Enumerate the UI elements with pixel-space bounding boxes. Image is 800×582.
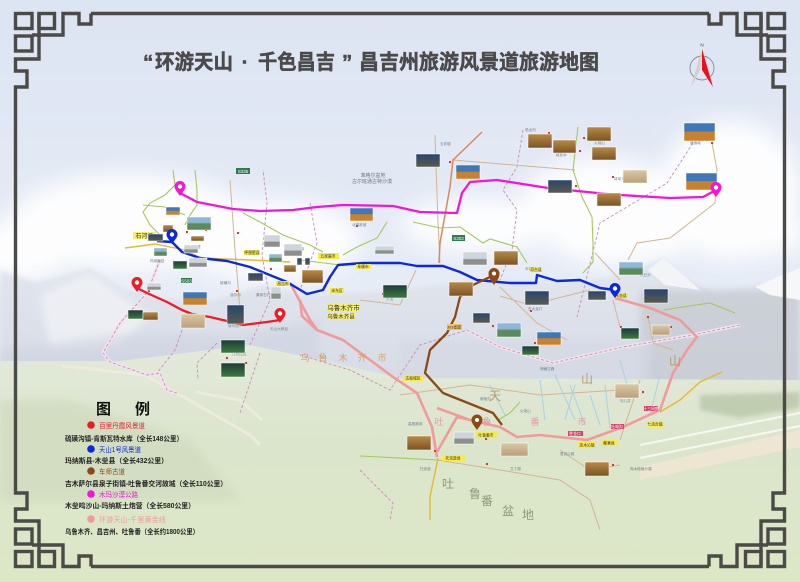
red tags: service stops: 十三间房 (643, 406, 659, 411)
map: small location labels: 魔鬼城 (690, 140, 701, 145)
background: mountains (0, 258, 800, 395)
pin: brown north (488, 268, 500, 285)
yellow tags: counties: 连木沁镇 (579, 442, 595, 448)
yellow tags: counties: 达坂城区 (405, 376, 421, 380)
title: ” (342, 51, 352, 74)
photo: west 1 (166, 207, 180, 215)
legend item: Cheshi ancient road (65, 467, 227, 488)
map: Urumqi region pink lettering: 乌 (300, 352, 310, 363)
map: large place name characters: 番 (481, 494, 493, 508)
route: blue Tianshan No.1 (157, 241, 615, 294)
green tags: road numbers: S303 (453, 236, 464, 241)
legend item: Cheshi ancient road: 吉木萨尔县泉子街镇-吐鲁番交河故城（全长110公里） (65, 479, 227, 488)
photo: west 9 (189, 258, 207, 267)
photo: south 5 (621, 328, 639, 339)
photo: Qitai 2 (588, 291, 606, 300)
map: Turpan region pink lettering (434, 416, 587, 427)
map: scenic spot marker dots (148, 132, 713, 466)
photo: north 4 (553, 140, 576, 153)
legend item: Danxia route: 百里丹霞风景道 (99, 421, 145, 430)
photo: Changji 2 (284, 244, 302, 256)
yellow tags: counties: 吐鲁番市 (478, 432, 494, 438)
yellow tags: counties: 木垒县 (615, 293, 627, 298)
map: small location labels: 北庭故城 (352, 222, 367, 227)
pin: blue west (166, 229, 178, 244)
yellow tags: counties: 米东区 (331, 288, 343, 293)
yellow tags: counties: 托克逊县 (445, 456, 461, 460)
map: large place name characters: 天 (489, 389, 501, 403)
photo: Mulei 2 (619, 262, 643, 275)
map: large place name characters: 地 (522, 508, 534, 522)
map: small location labels: 车师古道 (525, 266, 540, 271)
photo: Changji 4 (284, 265, 296, 272)
photo: Changji 5 (297, 258, 302, 265)
pin: blue east (610, 283, 620, 298)
map: small location labels: 火焰山 (520, 408, 531, 413)
map: small location labels: 托克逊 (420, 466, 431, 471)
photo: red route 6 (227, 305, 244, 324)
legend item: ring golden line: 环游天山-千里黄金线 (99, 515, 166, 524)
pin: red west (132, 277, 142, 292)
map: small location labels: 火烧山 (594, 140, 605, 145)
photo: Turpan sand (501, 443, 528, 456)
pin: brown south (472, 415, 482, 430)
map: large place name characters: 山 (581, 372, 593, 386)
yellow tags: counties: 阜康市 (357, 264, 369, 269)
map: orange expressway north (439, 132, 482, 263)
map: small location labels: 玛纳斯县 (150, 258, 165, 263)
map: Urumqi region pink lettering (300, 352, 387, 363)
route: magenta desert highway (180, 180, 716, 213)
map: small location labels: 硅化木 (556, 152, 567, 157)
photo: north 2 (456, 165, 480, 179)
green tags: road numbers (181, 168, 465, 283)
photo: Mulei 1 (644, 289, 668, 303)
photo: west 8 (173, 261, 187, 269)
legend (65, 401, 227, 536)
map: Urumqi region pink lettering: 齐 (357, 352, 367, 363)
yellow tags: counties: 鄯善县 (603, 440, 615, 446)
photo: Changji 7 (271, 287, 281, 299)
map: Urumqi region pink lettering: 鲁 (318, 352, 328, 363)
map: small location labels: 康家石门子 (256, 292, 274, 297)
route: brown ancient road (425, 275, 502, 425)
yellow tags: counties: 七克台镇 (647, 422, 663, 426)
photo: Kumtag desert (585, 462, 609, 476)
photo: Qitai 1 (525, 291, 549, 305)
map: Turpan region pink lettering: 吐 (434, 417, 444, 427)
map: Junggar basin label (352, 172, 392, 185)
yellow tag: Urumqi county: 乌鲁木齐县 (327, 312, 355, 320)
photo: west 5 (191, 236, 204, 241)
map: small location labels (150, 127, 701, 471)
photo: desert wall (597, 193, 621, 206)
background: clouds (0, 120, 800, 280)
yellow tag: Shihezi (133, 232, 156, 240)
map: Urumqi region pink lettering: 市 (377, 352, 387, 363)
legend item: desert highway: 木垒鸣沙山-玛纳斯土炮营（全长580公里） (65, 501, 195, 510)
photo: Shanshan (615, 384, 639, 398)
photo: west 3 (163, 225, 173, 232)
photo: forest (449, 282, 473, 296)
photo: Jimsar 2 (494, 251, 518, 265)
legend item: Tianshan No.1 route: 天山1号风景道 (99, 445, 141, 454)
photo: Mori 1 (684, 123, 715, 141)
yellow tag: Urumqi city: 乌鲁木齐市 (327, 303, 360, 312)
map: small location labels: 将军戈壁 (614, 176, 629, 181)
map: small location labels: 东大龙口 (528, 306, 543, 311)
photo: north 6 (592, 147, 616, 160)
title: 环游天山 (155, 50, 233, 74)
title: 昌吉州旅游风景道旅游地图 (359, 50, 599, 74)
photo: Turpan sunset (407, 436, 431, 450)
map: yellow highways (125, 244, 722, 520)
legend heading (96, 401, 150, 418)
map: small location labels: 高昌故城 (408, 421, 423, 426)
photo: red route 2 (183, 292, 207, 305)
map: large place name characters (442, 354, 681, 522)
map: Junggar basin label: 古尔班通古特沙漠 (352, 178, 392, 185)
green tags: road numbers: S335 (238, 169, 249, 174)
photo: south 4 (522, 346, 539, 355)
photo: Turpan ruin (454, 432, 474, 444)
title (143, 50, 599, 74)
photo: golden dome (302, 270, 323, 283)
map: small location labels: 天池 (386, 296, 394, 301)
yellow tags: counties: 昌吉市 (277, 281, 289, 286)
title: 千色昌吉 (258, 51, 335, 74)
background: grassland (0, 345, 800, 582)
photo: lake 1 (221, 340, 245, 353)
legend item: Tianshan No.1 route: 玛纳斯县-木垒县（全长432公里） (65, 456, 168, 465)
legend item: ring golden line: 乌鲁木齐、昌吉州、吐鲁番（全长约1800公里） (65, 527, 199, 536)
photo: pavilion (548, 180, 572, 193)
map: small location labels: 呼图壁 (190, 244, 201, 249)
pin: magenta west (174, 181, 186, 196)
map: Junggar basin label: 准格尔盆地 (360, 172, 386, 179)
photo: south 3 (537, 332, 561, 345)
yellow tags: counties: 呼图壁县 (244, 250, 260, 255)
pin: magenta east (710, 182, 722, 197)
map: small location labels: 庙尔沟 (230, 292, 241, 297)
legend item: desert highway (65, 490, 195, 510)
map: small location labels: 硫磺沟 (220, 280, 231, 285)
map: small location labels: 努尔加 (228, 323, 239, 328)
legend item: Danxia route (65, 421, 183, 443)
map: small location labels: 坎儿井 (620, 398, 631, 403)
photo: red route 3 (128, 310, 143, 319)
map: small location labels: 恐龙沟 (525, 127, 536, 132)
photo: Changji 1 (264, 235, 280, 247)
photo: north 5 (587, 127, 611, 141)
yellow tags: counties: 奇台县 (530, 267, 542, 272)
map: small location labels: 库木塔格沙漠 (630, 466, 652, 471)
photo: Shihezi (148, 234, 163, 241)
photo: west 7 (154, 248, 167, 256)
photo: north 3 (528, 134, 552, 148)
map: large place name characters: 盆 (502, 504, 514, 518)
map: administrative boundaries (103, 260, 740, 393)
photo: Mori 2 (686, 173, 717, 190)
photo: north desert (350, 208, 373, 221)
pin: red east (274, 308, 286, 323)
photo: south 6 (652, 325, 670, 335)
icon: north compass: N (700, 42, 704, 48)
photo: red route 4 (143, 312, 158, 320)
legend item: Cheshi ancient road: 车师古道 (99, 467, 125, 476)
map: Turpan region pink lettering: 市 (577, 416, 587, 427)
map: Turpan region pink lettering: 番 (530, 416, 540, 427)
map: small location labels: 江布拉克景区 (540, 341, 562, 346)
photo: Changji 3 (269, 254, 282, 262)
legend item: desert highway: 木玛沙漠公路 (99, 490, 138, 499)
map: large place name characters: 吐 (442, 477, 454, 491)
map: light blue rivers (490, 360, 660, 428)
photo: lake 2 (221, 363, 245, 377)
legend item: Danxia route: 硫磺沟镇-肯斯瓦特水库（全长148公里） (65, 434, 183, 443)
map: large place name characters: 山 (669, 354, 681, 368)
map: Urumqi region pink lettering: 木 (338, 352, 348, 363)
photo: west 2 (187, 217, 211, 230)
map: large place name characters: 鲁 (469, 487, 481, 501)
photo: west 6 (184, 245, 198, 253)
title: “ (143, 51, 153, 74)
map: small location labels: 葡萄沟 (480, 396, 491, 401)
photo: Jimsar 1 (463, 252, 487, 265)
legend heading: 例 (135, 401, 150, 418)
photo: north 1 (416, 154, 440, 167)
map: small location labels: 五彩城 (440, 141, 451, 146)
yellow tags: counties (244, 250, 664, 461)
route: ring road golden line (290, 283, 697, 457)
photo: south 1 (473, 313, 490, 323)
red tags: service stops: 胜金口 (569, 431, 581, 436)
photo: Changji 6 (305, 258, 310, 265)
red tags: service stops: 吐峪沟 (611, 424, 623, 429)
title: · (242, 51, 248, 74)
map: small location labels: 艾丁湖 (510, 466, 521, 471)
route: red Danxia (137, 288, 280, 325)
yellow tags: counties: 五家渠市 (320, 254, 336, 258)
photo: red route 5 (181, 314, 205, 328)
map: Turpan region pink lettering: 鲁 (482, 416, 492, 427)
map: small location labels: 昌吉回族 (290, 246, 305, 251)
map: small location labels: 博格达峰 (540, 366, 555, 371)
photo: north 7 (623, 170, 647, 183)
map: green highways (143, 127, 735, 460)
map: small location labels: 天山大峡谷 (270, 326, 288, 331)
legend item: Tianshan No.1 route (65, 445, 168, 465)
yellow tag: Shihezi: 石河子 (135, 232, 154, 240)
legend item: ring golden line (65, 515, 199, 536)
map: dashed boundaries (103, 130, 740, 520)
map: small location labels: 江布拉克 (232, 351, 247, 356)
map: small location labels: 大石头 (640, 272, 651, 277)
icon: north compass (690, 42, 714, 87)
red tags: service stops (568, 406, 659, 436)
photo: Hutubi (248, 273, 263, 281)
map: small location labels: 鲁克沁镇 (560, 451, 575, 456)
green tags: road numbers: S503 (181, 278, 192, 283)
photo: Heavenly Lake (383, 285, 407, 298)
photo thumbnails group (128, 123, 717, 476)
photo: Beiting (375, 246, 394, 254)
legend heading: 图 (96, 401, 111, 418)
photo: south 2 (497, 323, 521, 337)
yellow tags: counties: 303省道 (447, 324, 461, 330)
map: tan secondary roads (230, 135, 717, 530)
photo: red route 1 (147, 283, 161, 290)
